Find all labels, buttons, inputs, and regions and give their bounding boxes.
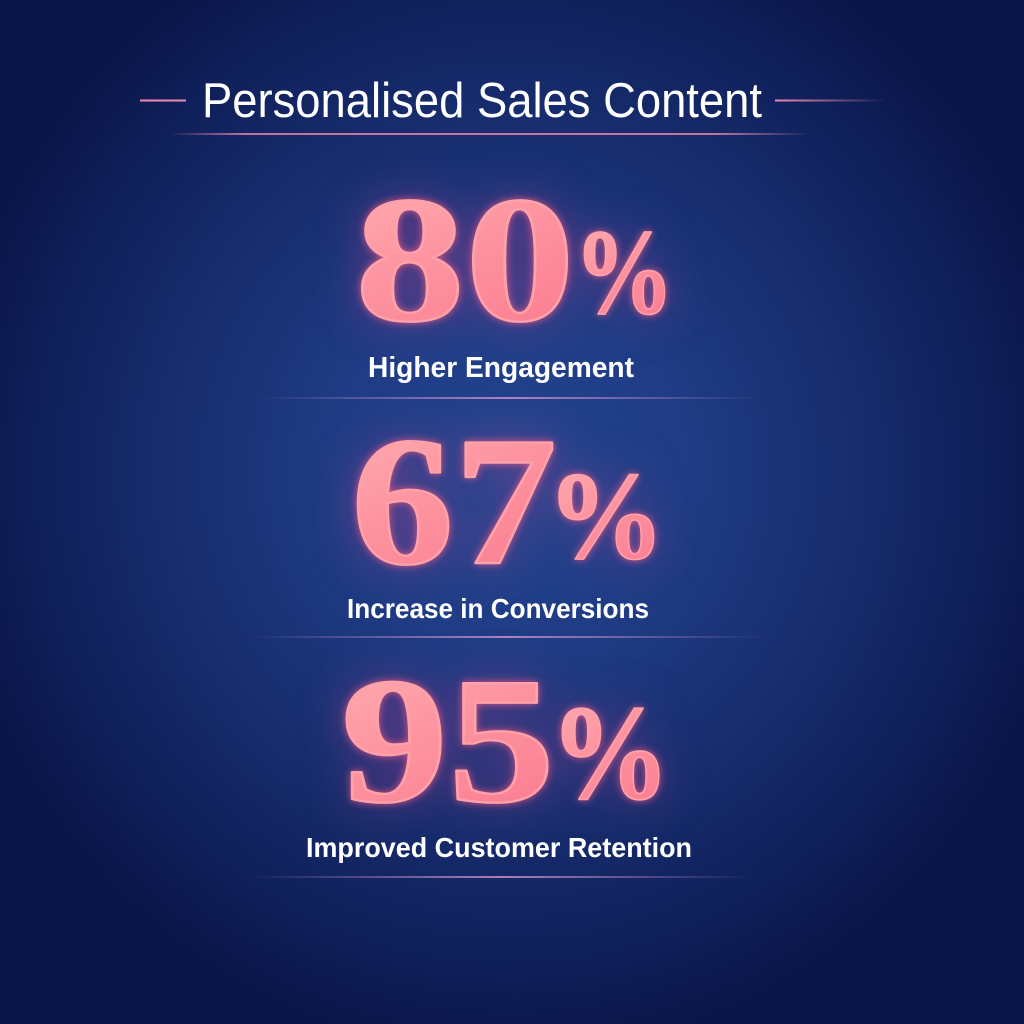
number: 80% [355,161,674,359]
stat: 95% improved customer retention: Improved Customer Retention [306,832,692,863]
stat: 80% higher engagement: Higher Engagement [368,352,634,384]
number: 95% [341,641,670,840]
stat: 67% increase in conversions [250,400,765,638]
number: 80%: % [574,206,674,340]
number: 80%: 80 [355,161,575,359]
number: 67% [351,400,664,604]
number: 95%: % [550,678,670,828]
stat: 95% improved customer retention [250,641,755,878]
title: Personalised Sales Content [202,74,762,128]
number: 95%: 95 [341,641,555,840]
stat: 67% increase in conversions: Increase in Conversions [347,593,649,624]
number: 67%: % [547,448,664,586]
stat: 80% higher engagement [260,161,760,399]
number: 67%: 67 [351,400,557,604]
